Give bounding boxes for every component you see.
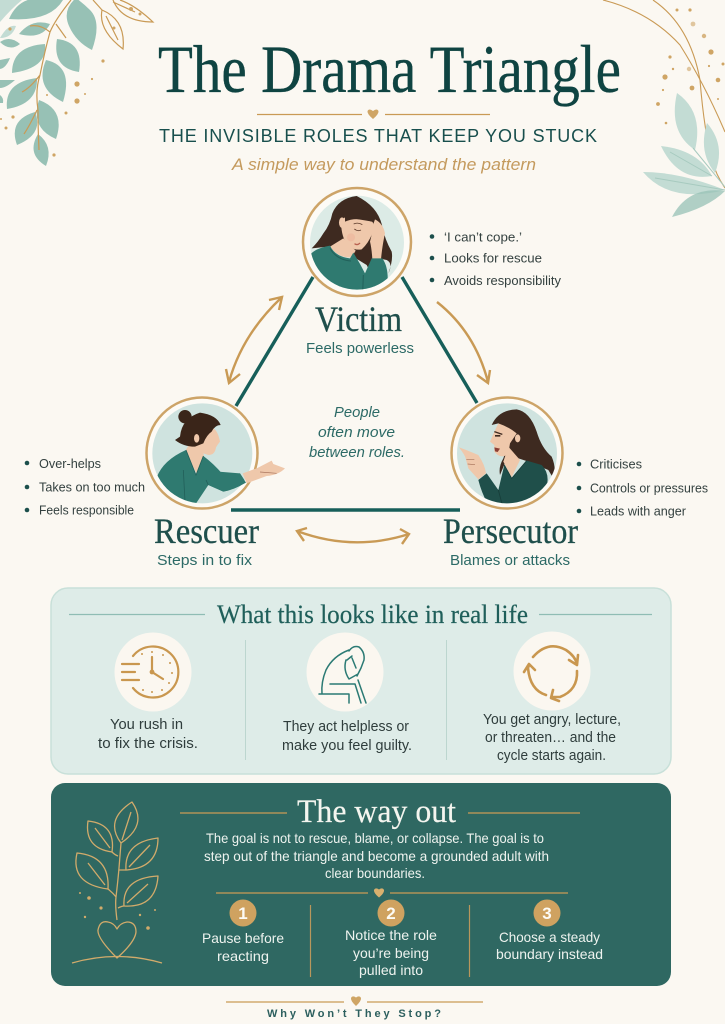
arrow: rescuer and persecutor xyxy=(297,528,409,544)
role label: rescuer xyxy=(154,511,259,569)
step 1: 1 xyxy=(238,904,248,923)
bullets: rescuer: Over-helps xyxy=(39,456,101,471)
step 3: boundary instead xyxy=(496,946,603,962)
decoration: top-left foliage xyxy=(0,0,153,166)
step 3: 3 xyxy=(542,904,552,923)
bullets: victim: Looks for rescue xyxy=(444,250,542,266)
illustration: plant growing from heart xyxy=(72,802,162,963)
bullets: rescuer: Feels responsible xyxy=(39,502,134,518)
icon: cycle arrows xyxy=(514,632,590,710)
bullets: persecutor: Controls or pressures xyxy=(590,480,708,496)
tagline: A simple way to understand the pattern xyxy=(231,155,536,174)
bullets: rescuer xyxy=(25,456,145,518)
card text: they act helpless xyxy=(282,719,412,754)
card text: you rush in: You rush in xyxy=(110,717,183,733)
steps divider with heart xyxy=(216,888,568,977)
step 2: pulled into xyxy=(359,962,423,978)
centre note: People xyxy=(334,405,380,421)
role label: persecutor xyxy=(443,511,578,569)
panel: what this looks like in real life xyxy=(51,588,671,774)
step 2: Notice the role xyxy=(345,927,437,943)
bullets: victim: ‘I can’t cope.’ xyxy=(444,230,522,244)
step 1: reacting xyxy=(217,948,269,964)
footer source: Why Won’t They Stop? xyxy=(267,1008,441,1020)
triangle diagram xyxy=(146,188,578,569)
panel heading: What this looks like in real life xyxy=(217,600,528,629)
card text: you get angry: cycle starts again. xyxy=(497,748,606,764)
subtitle: THE INVISIBLE ROLES THAT KEEP YOU STUCK xyxy=(159,126,597,146)
step 3: Choose a steady xyxy=(499,929,600,945)
card text: they act helpless: They act helpless or xyxy=(283,719,409,735)
goal paragraph xyxy=(204,830,549,881)
card text: you rush in: to fix the crisis. xyxy=(98,736,198,752)
role label: rescuer: Rescuer xyxy=(154,511,259,551)
role label: victim: Victim xyxy=(315,299,402,339)
bullets: persecutor: Criticises xyxy=(590,456,642,472)
card text: you get angry xyxy=(483,712,621,764)
icon: slumped person xyxy=(306,632,384,712)
card text: you get angry: You get angry, lecture, xyxy=(483,712,621,728)
bullets: persecutor xyxy=(577,456,708,518)
step 2: you’re being xyxy=(353,945,429,961)
arrow: victim to persecutor xyxy=(437,302,490,383)
goal paragraph: clear boundaries. xyxy=(325,865,425,881)
footer divider with heart xyxy=(226,996,483,1006)
card text: you rush in xyxy=(98,717,198,752)
title divider with heart xyxy=(257,110,490,119)
goal paragraph: The goal is not to rescue, blame, or collapse. The goal is to xyxy=(206,830,544,846)
step 3 xyxy=(496,900,603,962)
panel: the way out xyxy=(51,783,671,986)
decoration: top-right foliage xyxy=(603,0,725,217)
portrait: victim xyxy=(303,188,411,296)
step 2 xyxy=(345,900,437,978)
triangle lines xyxy=(231,277,477,510)
bullets: persecutor: Leads with anger xyxy=(590,504,687,518)
panel heading: The way out xyxy=(297,794,456,830)
bullets: victim xyxy=(430,230,561,288)
goal paragraph: step out of the triangle and become a grounded adult with xyxy=(204,848,549,864)
arrow: victim to and from rescuer xyxy=(226,297,282,383)
portrait: rescuer xyxy=(146,398,285,508)
step 2: 2 xyxy=(386,904,396,923)
title: The Drama Triangle xyxy=(158,31,621,107)
bullets: rescuer: Takes on too much xyxy=(39,480,145,494)
card text: they act helpless: make you feel guilty. xyxy=(282,738,412,754)
bullets: victim: Avoids responsibility xyxy=(444,273,561,288)
step 1 xyxy=(202,900,284,964)
step 1: Pause before xyxy=(202,930,284,946)
role label: rescuer: Steps in to fix xyxy=(157,552,253,569)
card text: you get angry: or threaten… and the xyxy=(485,730,616,746)
centre note: often move xyxy=(318,425,395,441)
role label: victim xyxy=(306,299,414,357)
centre note: between roles. xyxy=(309,445,405,461)
portrait: persecutor xyxy=(452,398,562,508)
centre note xyxy=(309,405,405,461)
role label: persecutor: Blames or attacks xyxy=(450,552,570,569)
icon: rushing clock xyxy=(114,632,192,712)
role label: persecutor: Persecutor xyxy=(443,511,578,551)
role label: victim: Feels powerless xyxy=(306,340,414,357)
